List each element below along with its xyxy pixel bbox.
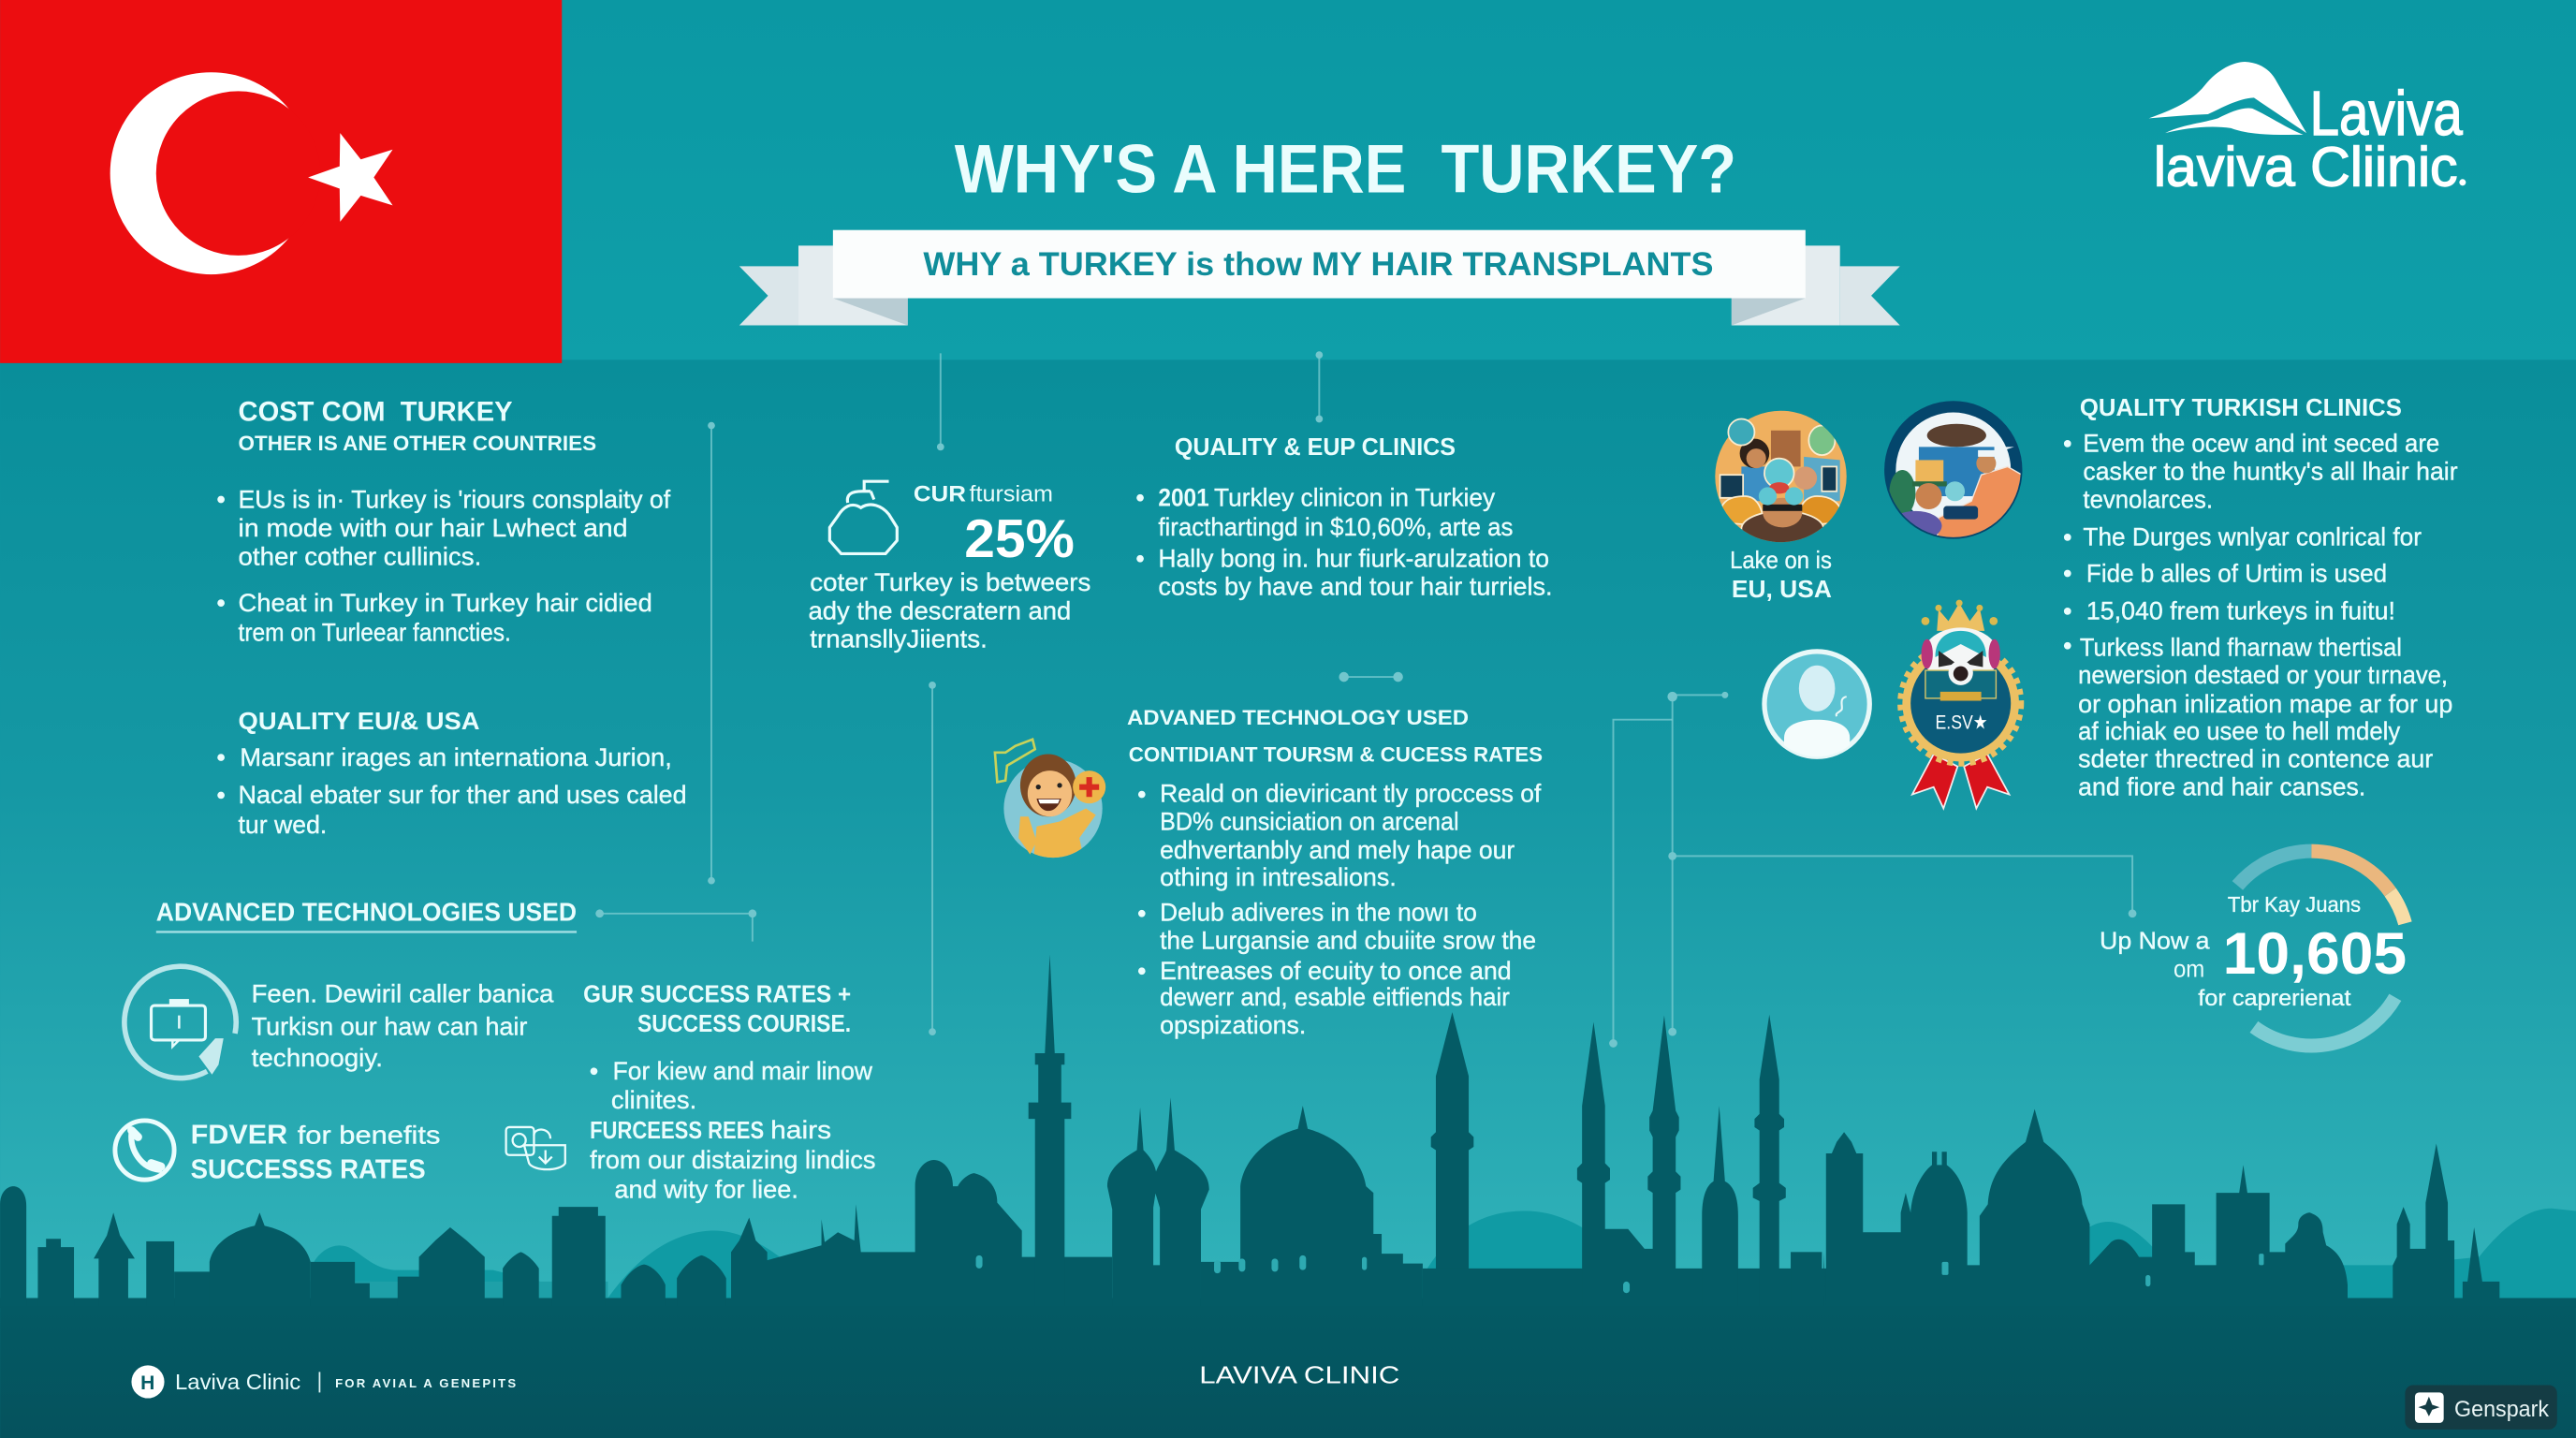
icon: clinic treatment scene — [1884, 401, 2022, 539]
panel: quality EU and USA — [217, 707, 687, 839]
success bullet: For kiew and mair linow — [613, 1056, 872, 1085]
Istanbul skyline — [0, 955, 2576, 1308]
bullet list: Evem the ocew and int seced are — [2083, 429, 2439, 458]
logo: Laviva — [2310, 80, 2464, 149]
clinic bullet list: Hally bong in. hur fiurk-arulzation to — [1158, 543, 1549, 572]
Genspark badge — [2405, 1385, 2557, 1430]
bullet list: Fide b alles of Urtim is used — [2086, 558, 2387, 587]
bullet list: newersion destaed or your tırnave, — [2078, 660, 2448, 689]
panel: quality Turkish clinics — [2064, 395, 2458, 800]
clinic bullet list: costs by have and tour hair turriels. — [1158, 571, 1553, 600]
bullet list: BD% cunsiciation on arcenal — [1160, 806, 1459, 835]
icon: phone — [115, 1121, 174, 1180]
donut labels: Up Now a — [2100, 929, 2210, 955]
technology description: technoogiy. — [252, 1043, 383, 1072]
footer clinic name: Laviva Clinic — [175, 1370, 300, 1394]
bullet list: af ichiak eo usee to hell mdely — [2078, 716, 2401, 745]
heading: QUALITY & EUP CLINICS — [1175, 434, 1456, 461]
benefits text: SUCCESSS RATES — [191, 1154, 426, 1184]
description: ady the descratern and — [809, 596, 1071, 625]
description: coter Turkey is betweers — [810, 567, 1090, 596]
technology description: Turkisn our haw can hair — [252, 1012, 527, 1041]
cost bullet list: Cheat in Turkey in Turkey hair cidied — [239, 588, 652, 617]
cost bullet list: other cother cullinics. — [239, 542, 481, 571]
icon: Genspark — [2415, 1392, 2444, 1423]
panel: cost compared to other countries — [217, 396, 671, 646]
buildings — [0, 955, 2576, 1308]
cost bullet list: in mode with our hair Lwhect and — [239, 513, 627, 542]
cost bullet list — [217, 484, 671, 646]
heading — [583, 982, 851, 1037]
label: ftursiam — [970, 482, 1053, 506]
bullet list: Entreases of ecuity to once and — [1160, 956, 1512, 985]
benefits text: for benefits — [298, 1120, 440, 1149]
bullet list: othing in intresalions. — [1160, 862, 1397, 891]
furcess text: and wity for liee. — [614, 1174, 798, 1203]
bullet list — [2064, 429, 2458, 800]
icon: crowd of people — [1715, 411, 1847, 547]
quality bullet list: Nacal ebater sur for ther and uses caled — [239, 780, 687, 809]
label — [914, 482, 1053, 506]
footer centre brand: LAVIVA CLINIC — [1199, 1361, 1399, 1389]
bullet list: 15,040 frem turkeys in fuitu! — [2086, 596, 2395, 625]
bullet list: edhvertanbly and mely hape our — [1160, 835, 1515, 864]
description — [809, 567, 1090, 653]
bullet list: dewerr and, esable eitfiends hair — [1160, 982, 1510, 1011]
icon: person avatar — [1764, 652, 1869, 759]
headings — [1127, 706, 1543, 766]
furcess text: FURCEESS REES — [590, 1118, 764, 1144]
icon: monitor in circular arrow — [124, 966, 236, 1078]
bullet list: the Lurgansie and cbuiite srow the — [1160, 926, 1536, 955]
label: Lake on is EU, USA: EU, USA — [1732, 575, 1832, 603]
heading: COST COM TURKEY — [239, 396, 513, 427]
bullet list: opspizations. — [1160, 1010, 1306, 1039]
quality bullet list: tur wed. — [239, 810, 327, 839]
chart: donut statistic — [2100, 851, 2407, 1046]
heading: SUCCESS COURISE. — [637, 1011, 851, 1037]
clinic bullet list — [1136, 483, 1553, 600]
subheading: OTHER IS ANE OTHER COUNTRIES — [239, 432, 596, 455]
panel: 25 percent statistic — [809, 481, 1090, 653]
technology description — [252, 979, 554, 1072]
bullet list: or ophan inlization mape ar for up — [2078, 689, 2452, 718]
success bullet — [591, 1056, 872, 1114]
clinic bullet list: Turkley clinicon in Turkiey — [1214, 483, 1496, 512]
clinic bullet list: firacthartingd in $10,60%, arte as — [1158, 512, 1513, 541]
big number: 10,605 — [2223, 921, 2407, 987]
Turkish flag — [0, 0, 562, 363]
heading: GUR SUCCESS RATES + — [583, 982, 851, 1008]
bullet list: and fiore and hair canses. — [2078, 771, 2365, 800]
benefits text: FDVER — [191, 1120, 287, 1150]
benefits text — [191, 1120, 440, 1184]
headings: CONTIDIANT TOURSM & CUCESS RATES — [1129, 742, 1543, 766]
donut labels: for caprerienat — [2198, 987, 2351, 1011]
success bullet: clinites. — [611, 1085, 696, 1114]
heading: ADVANCED TECHNOLOGIES USED — [156, 898, 577, 927]
label: Lake on is EU, USA — [1730, 548, 1832, 603]
icon: award badge — [1902, 600, 2020, 808]
panel: quality and EUP clinics — [1136, 434, 1553, 600]
icon: H logo: H — [140, 1372, 154, 1394]
donut labels: om — [2174, 956, 2204, 982]
arched windows — [976, 1254, 2263, 1293]
bullet list: Reald on dieviricant tly proccess of — [1160, 778, 1542, 807]
quality bullet list — [217, 742, 687, 839]
logo: laviva Cliinic — [2154, 135, 2458, 198]
furcess text: from our distaizing lindics — [590, 1145, 875, 1174]
headings: ADVANED TECHNOLOGY USED — [1127, 706, 1469, 729]
furcess text — [590, 1115, 875, 1203]
description: trnansllyJiients. — [810, 624, 988, 653]
quality bullet list: Marsanr irages an internationa Jurion, — [240, 742, 672, 771]
logo — [2149, 62, 2466, 198]
clinic bullet list: 2001 — [1158, 483, 1209, 512]
bullet list — [1138, 778, 1542, 1039]
background hills — [178, 1209, 2576, 1298]
bullet list: sdeter threctred in contence aur — [2078, 744, 2433, 773]
connector lines — [595, 351, 2136, 1048]
label: Lake on is EU, USA: Lake on is — [1730, 548, 1832, 574]
panel: advanced technology and confidant tourism — [995, 706, 1543, 1039]
cost bullet list: EUs is in· Turkey is 'riours consplaity of — [239, 484, 671, 513]
icon: H logo — [131, 1365, 165, 1399]
icon: smiling patient — [995, 740, 1105, 861]
cost bullet list: trem on Turleear fanncties. — [239, 617, 511, 646]
badge text: E.SV★ — [1935, 712, 1988, 733]
Genspark text: Genspark — [2454, 1398, 2549, 1422]
bullet list: casker to the huntky's all lhair hair — [2083, 456, 2458, 485]
heading: QUALITY EU/& USA — [239, 707, 480, 735]
bullet list: Turkess lland fharnaw thertisal — [2080, 632, 2402, 661]
banner text: WHY a TURKEY is thow MY HAIR TRANSPLANTS — [923, 246, 1714, 283]
heading: QUALITY TURKISH CLINICS — [2080, 395, 2402, 421]
donut labels: Tbr Kay Juans — [2228, 892, 2361, 917]
footer tagline: FOR AVIAL A GENEPITS — [335, 1376, 516, 1390]
footer band — [0, 1306, 2576, 1438]
panel: advanced technologies — [115, 898, 577, 1184]
icon: chat and person — [506, 1127, 565, 1169]
bullet list: Delub adiveres in the nowı to — [1160, 898, 1477, 927]
percentage: 25% — [964, 509, 1075, 569]
furcess text: hairs — [770, 1115, 831, 1144]
footer left brand — [131, 1365, 516, 1399]
donut labels — [2100, 892, 2361, 1011]
ribbon banner — [739, 230, 1900, 325]
panel: success rates — [506, 982, 875, 1203]
technology description: Feen. Dewiril caller banica — [252, 979, 554, 1008]
icon: bottle — [829, 481, 897, 553]
donut arcs — [2237, 851, 2405, 1046]
title: WHY'S A HERE TURKEY? — [955, 129, 1736, 207]
bullet list: The Durges wnlyar conlrical for — [2083, 522, 2422, 551]
bullet list: tevnolarces. — [2083, 484, 2213, 513]
label: CUR — [914, 482, 966, 506]
